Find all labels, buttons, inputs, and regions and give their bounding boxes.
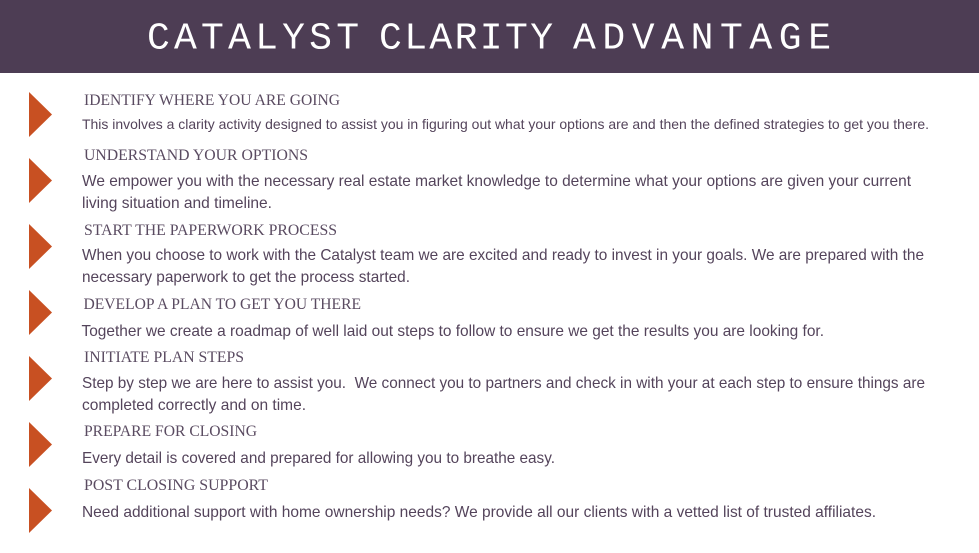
body 5: completed correctly and on time. xyxy=(82,397,306,414)
body 6: Every detail is covered and prepared for allowing you to breathe easy. xyxy=(82,450,555,467)
step 5: initiate plan steps xyxy=(29,349,925,414)
heading 4: DEVELOP A PLAN TO GET YOU THERE xyxy=(84,296,361,313)
body 2: We empower you with the necessary real estate market knowledge to determine what your options are given your current xyxy=(82,173,912,190)
body 3: When you choose to work with the Catalyst team we are excited and ready to invest in your goals. We are prepared with the xyxy=(82,247,924,264)
header banner xyxy=(0,0,979,73)
icon: arrow 4 xyxy=(29,290,52,335)
step 1: identify where you are going xyxy=(29,92,929,137)
heading 1: IDENTIFY WHERE YOU ARE GOING xyxy=(84,92,340,109)
body 2: living situation and timeline. xyxy=(82,195,272,212)
body 5: Step by step we are here to assist you. We connect you to partners and check in with your at each step to ensure things are xyxy=(82,375,925,392)
heading 2: UNDERSTAND YOUR OPTIONS xyxy=(84,147,308,164)
icon: arrow 1 xyxy=(29,92,52,137)
icon: arrow 3 xyxy=(29,224,52,269)
icon: arrow 7 xyxy=(29,488,52,533)
icon: arrow 2 xyxy=(29,158,52,203)
heading 3: START THE PAPERWORK PROCESS xyxy=(84,222,337,239)
title: ADVANTAGE xyxy=(573,18,831,60)
body 7: Need additional support with home ownership needs? We provide all our clients with a vetted list of trusted affiliates. xyxy=(82,504,876,521)
heading 6: PREPARE FOR CLOSING xyxy=(84,423,257,440)
step 2: understand your options xyxy=(29,147,912,212)
step 7: post closing support xyxy=(29,477,876,533)
title: CLARITY xyxy=(379,18,553,60)
step 4: develop a plan to get you there xyxy=(29,290,824,340)
heading 7: POST CLOSING SUPPORT xyxy=(84,477,268,494)
icon: arrow 6 xyxy=(29,422,52,467)
icon: arrow 5 xyxy=(29,356,52,401)
step 3: start the paperwork process xyxy=(29,222,924,286)
body 1: This involves a clarity activity designed to assist you in figuring out what your options are and then the defined strategies to get you there. xyxy=(82,116,929,132)
body 4: Together we create a roadmap of well laid out steps to follow to ensure we get the results you are looking for. xyxy=(82,323,824,340)
heading 5: INITIATE PLAN STEPS xyxy=(84,349,244,366)
step 6: prepare for closing xyxy=(29,422,555,467)
title: CATALYST xyxy=(147,18,359,60)
body 3: necessary paperwork to get the process started. xyxy=(82,269,410,286)
